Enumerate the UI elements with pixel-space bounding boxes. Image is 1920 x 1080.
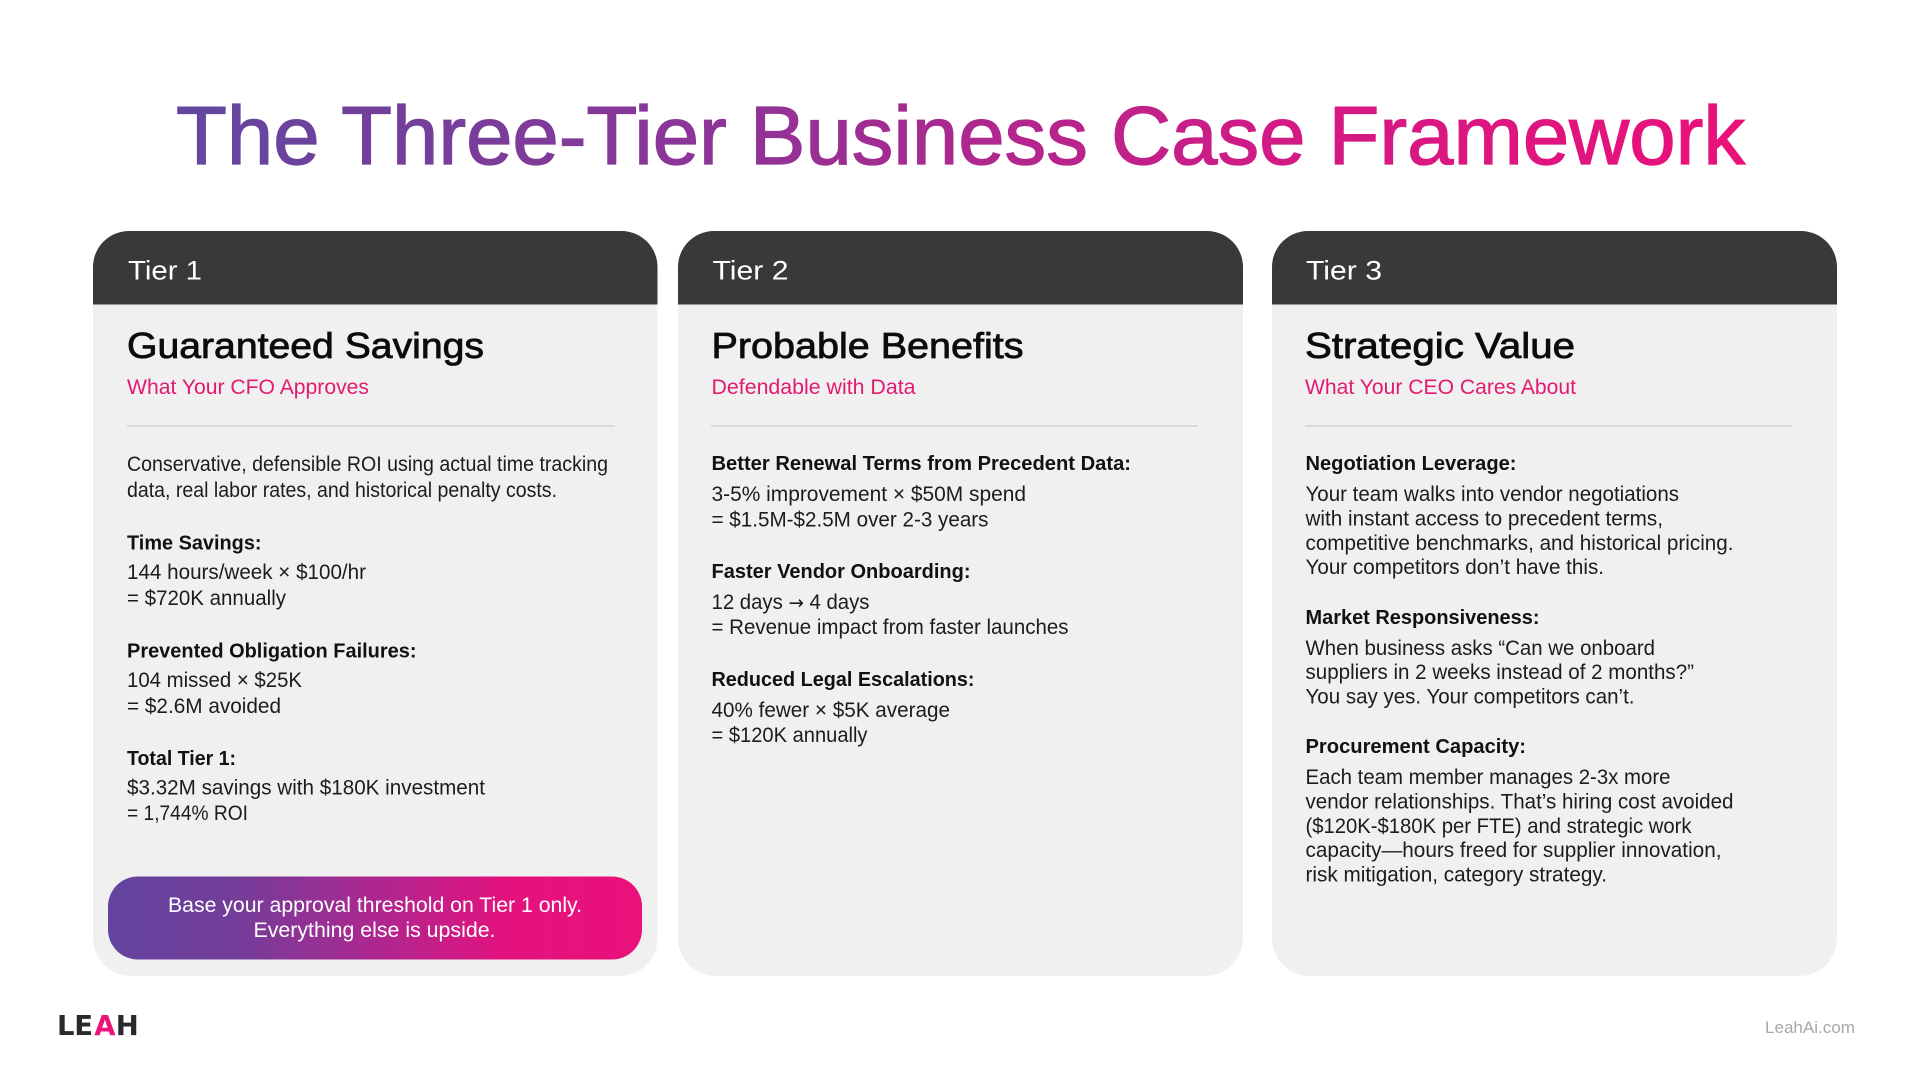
- subtitle: What Your CFO Approves: [127, 376, 369, 399]
- block: reduced legal escalations: Reduced Legal Escalations:: [712, 669, 974, 691]
- block: procurement capacity: capacity—hours freed for supplier innovation,: [1306, 839, 1722, 862]
- block: better renewal terms: [712, 453, 1131, 532]
- block: procurement capacity: vendor relationships. That’s hiring cost avoided: [1306, 790, 1734, 814]
- block: negotiation leverage: [1305, 453, 1734, 579]
- block: negotiation leverage: competitive benchmarks, and historical pricing.: [1306, 532, 1734, 555]
- block: prevented obligation failures: Prevented Obligation Failures:: [127, 640, 416, 662]
- block: market responsiveness: suppliers in 2 weeks instead of 2 months?”: [1306, 661, 1694, 684]
- intro text: Conservative, defensible ROI using actual time tracking: [127, 453, 608, 476]
- block: time savings: 144 hours/week × $100/hr: [127, 561, 366, 584]
- block: better renewal terms: = $1.5M-$2.5M over 2-3 years: [712, 508, 988, 532]
- block: negotiation leverage: Your competitors don’t have this.: [1306, 556, 1604, 579]
- block: reduced legal escalations: 40% fewer × $5K average: [712, 699, 950, 722]
- block: prevented obligation failures: 104 missed × $25K: [127, 669, 302, 692]
- block: market responsiveness: You say yes. Your competitors can’t.: [1306, 686, 1634, 708]
- subtitle: What Your CEO Cares About: [1305, 376, 1576, 399]
- heading: Strategic Value: [1305, 325, 1575, 366]
- block: faster vendor onboarding: Faster Vendor Onboarding:: [712, 561, 970, 583]
- callout: Everything else is upside.: [254, 919, 496, 942]
- tier header: [93, 231, 658, 304]
- block: reduced legal escalations: [712, 669, 974, 747]
- heading: Probable Benefits: [712, 325, 1024, 366]
- block: procurement capacity: Each team member manages 2-3x more: [1306, 766, 1670, 789]
- block: better renewal terms: 3-5% improvement × $50M spend: [712, 483, 1026, 506]
- block: procurement capacity: risk mitigation, category strategy.: [1306, 864, 1607, 886]
- block: time savings: = $720K annually: [127, 587, 286, 610]
- panel: tier 2: [678, 231, 1243, 976]
- logo: LEAH: L: [57, 1010, 75, 1042]
- tier header: Tier 1: [128, 256, 202, 286]
- callout: [108, 876, 642, 960]
- logo: LEAH: E: [74, 1010, 93, 1042]
- block: procurement capacity: Procurement Capacity:: [1306, 736, 1526, 758]
- block: total tier 1: = 1,744% ROI: [127, 802, 248, 825]
- block: negotiation leverage: Your team walks into vendor negotiations: [1306, 483, 1679, 506]
- block: time savings: [127, 532, 366, 610]
- block: total tier 1: [127, 748, 485, 825]
- block: prevented obligation failures: [127, 640, 416, 718]
- card body: [93, 231, 658, 976]
- block: faster vendor onboarding: = Revenue impact from faster launches: [712, 616, 1068, 639]
- intro text: [127, 453, 608, 502]
- block: negotiation leverage: Negotiation Leverage:: [1306, 453, 1516, 475]
- block: market responsiveness: Market Responsiveness:: [1306, 607, 1540, 629]
- website label: LeahAi.com: [1765, 1018, 1855, 1037]
- block: procurement capacity: ($120K-$180K per FTE) and strategic work: [1306, 815, 1692, 838]
- block: total tier 1: Total Tier 1:: [127, 748, 236, 770]
- block: negotiation leverage: with instant access to precedent terms,: [1305, 508, 1663, 530]
- card body: [1272, 231, 1837, 976]
- tier header: [1272, 231, 1837, 304]
- block: market responsiveness: [1306, 607, 1694, 708]
- logo: LEAH: A: [94, 1010, 116, 1042]
- panel: tier 1: [93, 231, 658, 976]
- card body: [678, 231, 1243, 976]
- tier header: Tier 3: [1306, 256, 1382, 286]
- block: market responsiveness: When business asks “Can we onboard: [1306, 637, 1655, 660]
- block: faster vendor onboarding: [712, 561, 1068, 639]
- logo: LEAH: [57, 1010, 139, 1042]
- block: faster vendor onboarding: 12 days → 4 days: [712, 591, 870, 614]
- block: better renewal terms: Better Renewal Terms from Precedent Data:: [712, 453, 1131, 475]
- subtitle: Defendable with Data: [712, 376, 916, 399]
- tier header: [678, 231, 1243, 304]
- logo: LEAH: H: [116, 1010, 139, 1042]
- callout: Base your approval threshold on Tier 1 only.: [168, 894, 582, 917]
- block: time savings: Time Savings:: [127, 532, 262, 554]
- panel: tier 3: [1272, 231, 1837, 976]
- block: procurement capacity: [1306, 736, 1734, 886]
- tier header: Tier 2: [712, 256, 788, 286]
- heading: Guaranteed Savings: [127, 325, 484, 366]
- block: prevented obligation failures: = $2.6M avoided: [127, 695, 281, 718]
- block: reduced legal escalations: = $120K annually: [712, 724, 868, 747]
- block: total tier 1: $3.32M savings with $180K investment: [127, 776, 485, 800]
- intro text: data, real labor rates, and historical penalty costs.: [127, 479, 557, 502]
- title: The Three-Tier Business Case Framework: [176, 89, 1745, 182]
